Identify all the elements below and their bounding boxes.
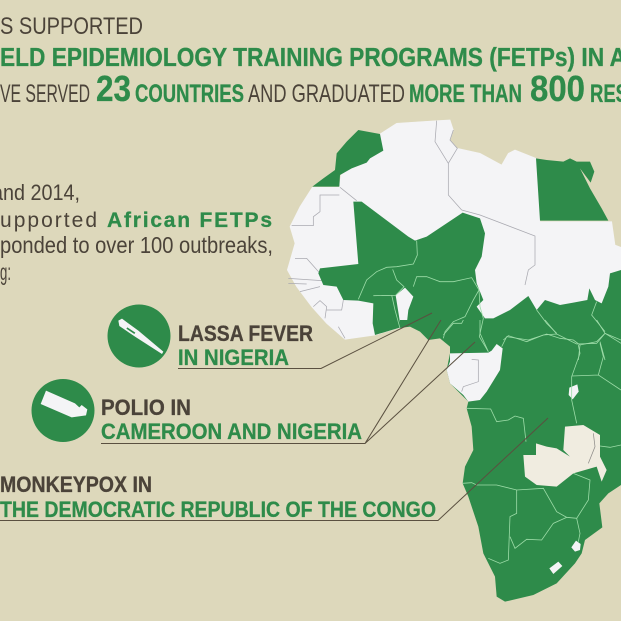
intro text block bbox=[0, 180, 273, 285]
leader line bbox=[0, 418, 548, 520]
Lesotho bbox=[571, 541, 581, 552]
intro text block: ponded to over 100 outbreaks, bbox=[0, 232, 273, 258]
callout: polio in Cameroon and Nigeria: CAMEROON AND NIGERIA bbox=[101, 419, 362, 444]
icon: thermometer bbox=[108, 304, 170, 368]
subtitle with key numbers: COUNTRIES bbox=[135, 80, 244, 108]
subtitle with key numbers: VE SERVED bbox=[0, 80, 90, 108]
Egypt bbox=[536, 158, 608, 221]
light green national borders: south bbox=[443, 320, 621, 563]
subtitle with key numbers: MORE THAN bbox=[409, 80, 522, 108]
title line: supported: S SUPPORTED bbox=[0, 13, 143, 40]
leader lines bbox=[101, 320, 475, 444]
leader line bbox=[178, 313, 432, 368]
callout: Lassa fever in Nigeria: IN NIGERIA bbox=[178, 345, 289, 370]
program countries: central and southern bbox=[400, 320, 621, 602]
light green national borders: north bbox=[358, 241, 621, 360]
map of Africa bbox=[287, 120, 621, 602]
callout: monkeypox in the DRC: THE DEMOCRATIC REPUBLIC OF THE CONGO bbox=[0, 497, 436, 522]
callout text: MONKEYPOX IN bbox=[0, 472, 152, 497]
northern and western non-program countries bbox=[287, 120, 621, 339]
Sahel and central belt bbox=[318, 202, 621, 335]
icon: vaccine vial bbox=[32, 379, 94, 442]
Swaziland bbox=[549, 562, 562, 574]
intro text block: g: bbox=[0, 259, 11, 285]
callout text: POLIO IN bbox=[101, 395, 191, 420]
program countries: north and west bbox=[312, 130, 621, 335]
subtitle with key numbers: 800 bbox=[530, 68, 585, 109]
Morocco bbox=[312, 130, 383, 187]
callout text: LASSA FEVER bbox=[178, 321, 313, 346]
subtitle with key numbers bbox=[0, 68, 621, 109]
intro text block: upported bbox=[0, 209, 97, 232]
subtitle with key numbers: 23 bbox=[96, 68, 131, 109]
Zambia and Malawi bbox=[523, 425, 607, 487]
Benin bbox=[396, 288, 413, 327]
Gabon and Congo bbox=[447, 344, 503, 402]
callout: polio in Cameroon and Nigeria bbox=[32, 320, 475, 444]
callout: Lassa fever in Nigeria bbox=[108, 304, 432, 370]
subtitle with key numbers: AND GRADUATED bbox=[248, 80, 405, 108]
Burundi bbox=[569, 384, 579, 399]
intro text block: African FETPs bbox=[107, 209, 272, 232]
callout: monkeypox in the DRC bbox=[0, 418, 548, 522]
title bbox=[0, 13, 621, 109]
grey borders on white countries bbox=[288, 121, 535, 338]
